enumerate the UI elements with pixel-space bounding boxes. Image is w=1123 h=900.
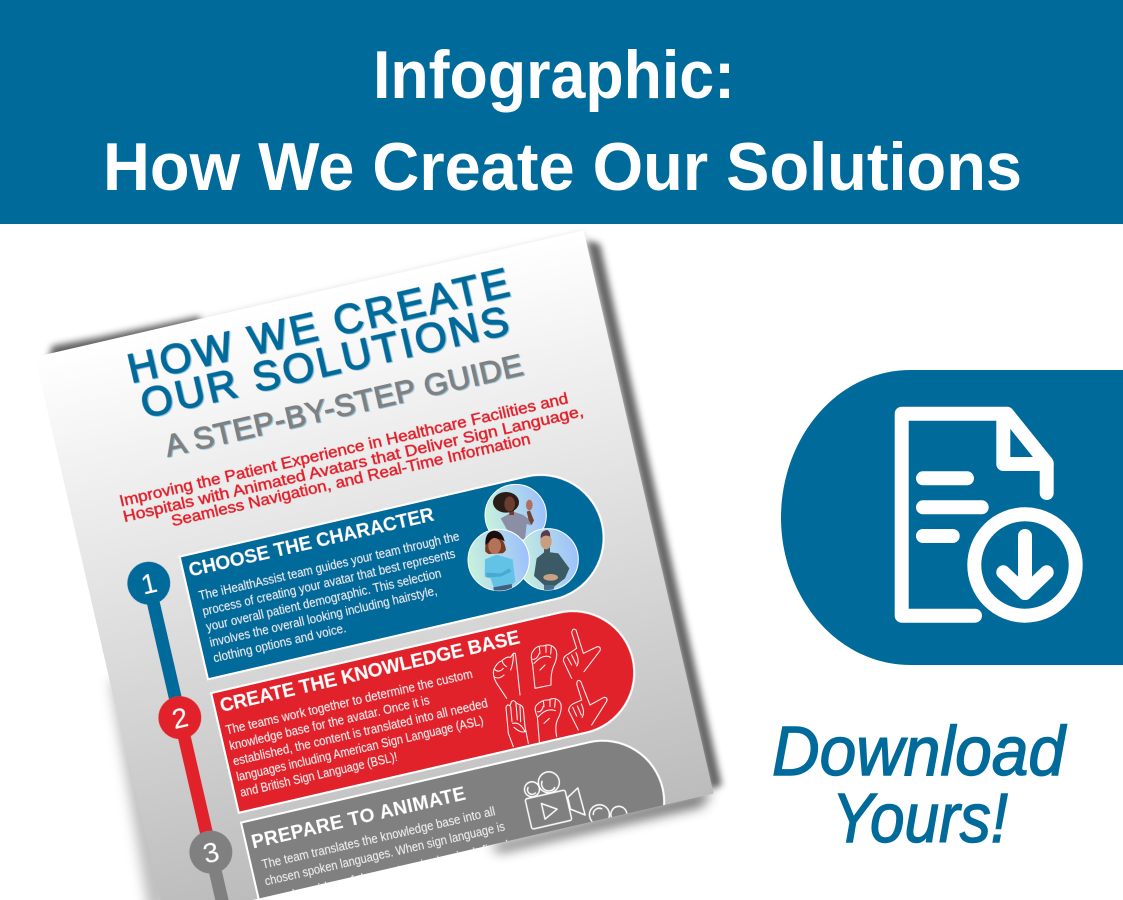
- step 2 body: [224, 671, 488, 797]
- header banner: [0, 0, 1123, 224]
- step 1 body: process of creating your avatar that best represents: [201, 546, 457, 619]
- step 3 body: chosen spoken languages. When sign language is: [263, 819, 506, 889]
- step 3 marker: [189, 830, 232, 874]
- step 1 body: The iHealthAssist team guides your team through the: [197, 528, 461, 603]
- step 2 body: knowledge base for the avatar. Once it is: [228, 692, 431, 753]
- timeline connector: gray: [209, 870, 228, 900]
- icon: document with download arrow: [902, 414, 1076, 616]
- call to action text: Yours!: [832, 779, 1008, 857]
- document page: [35, 230, 714, 900]
- avatars group: [468, 484, 578, 592]
- panel: prepare to animate: [241, 728, 676, 900]
- icon: sign language hands: [493, 629, 607, 747]
- step 2 body: established, the content is translated into all needed: [231, 695, 489, 769]
- icon: flat hand sign: [506, 701, 528, 747]
- step 1 marker: 1: [138, 567, 160, 601]
- call to action text: [772, 712, 1067, 857]
- step 3 marker: 3: [200, 836, 222, 869]
- icon: second camera reels: [588, 804, 628, 822]
- icon: hand sign A: [493, 653, 520, 698]
- step 3 heading: PREPARE TO ANIMATE: [250, 784, 468, 853]
- timeline connector: red: [178, 736, 213, 834]
- download panel: [781, 370, 1123, 665]
- panel: create the knowledge base: [211, 599, 647, 813]
- icon: L hand sign: [563, 629, 600, 678]
- step 1 marker: [127, 561, 171, 605]
- step 2 body: The teams work together to determine the custom: [224, 666, 474, 737]
- step 2 marker: 2: [169, 701, 191, 735]
- avatar: man in dark sweater: [517, 529, 578, 592]
- step 2 heading: CREATE THE KNOWLEDGE BASE: [218, 627, 522, 717]
- step 1 body: your overall patient demographic. This selection: [204, 565, 443, 634]
- red intro text: Hospitals with Animated Avatars that Deliver Sign Language,: [122, 403, 585, 526]
- document subtitle: A STEP-BY-STEP GUIDE: [162, 347, 526, 463]
- step 2 marker: [158, 696, 202, 740]
- red intro text: Seamless Navigation, and Real-Time Information: [170, 431, 532, 530]
- document title: OUR SOLUTIONS: [136, 297, 513, 427]
- document title: HOW WE CREATE: [123, 259, 513, 392]
- tilted infographic document: [35, 230, 724, 900]
- icon: second fist sign: [535, 699, 561, 742]
- step 1 body: [198, 533, 460, 662]
- title line 1: Infographic:: [373, 37, 735, 113]
- avatar: woman in blue sweater: [468, 529, 529, 592]
- icon: video camera: [520, 766, 586, 829]
- step 2 body: languages including American Sign Language (ASL): [235, 713, 485, 784]
- step 1 heading: CHOOSE THE CHARACTER: [187, 505, 436, 582]
- panel: choose the character: [180, 462, 616, 679]
- step 1 body: clothing options and voice.: [212, 620, 348, 665]
- title line 2: How We Create Our Solutions: [103, 129, 1022, 205]
- step 1 body: involves the overall looking including hairstyle,: [208, 583, 438, 650]
- red intro text: Improving the Patient Experience in Healthcare Facilities and: [118, 390, 570, 510]
- call to action text: Download: [772, 712, 1067, 790]
- icon: second L hand sign: [569, 680, 607, 730]
- timeline connector: blue: [147, 602, 182, 700]
- icon: fist sign: [531, 645, 557, 688]
- step 3 body: The team translates the knowledge base into all: [260, 803, 497, 872]
- step 2 body: and British Sign Language (BSL)!: [239, 749, 399, 800]
- avatar: woman waving: [485, 484, 546, 546]
- document shadow: [48, 232, 722, 900]
